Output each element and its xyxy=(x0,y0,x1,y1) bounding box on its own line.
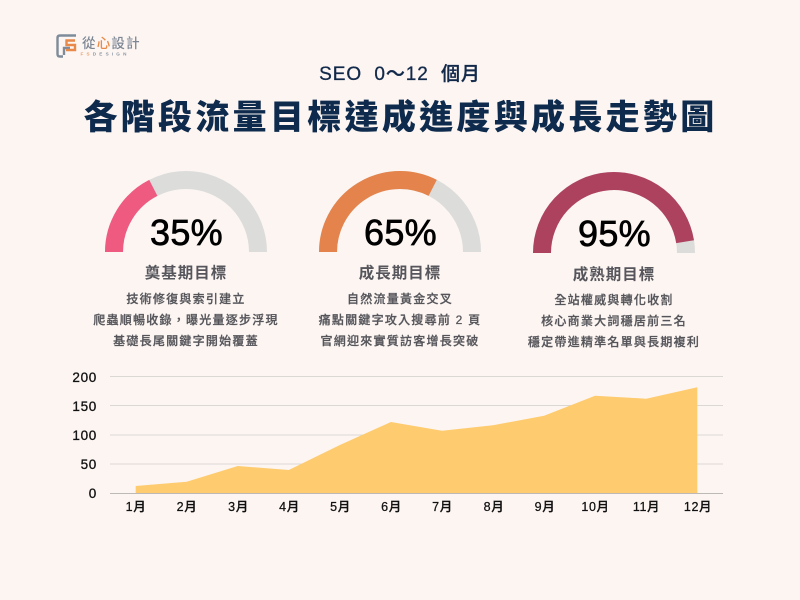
x axis labels: 7月 xyxy=(432,500,453,514)
description: foundation xyxy=(93,291,279,348)
value: 35%: 35% xyxy=(150,212,223,253)
x axis line xyxy=(110,492,723,494)
description: foundation: 基礎長尾關鍵字開始覆蓋 xyxy=(113,333,259,348)
heading: foundation goal: 奠基期目標 xyxy=(145,263,227,282)
x axis labels: 1月 xyxy=(126,500,146,514)
x axis labels: 6月 xyxy=(381,500,402,514)
x axis labels: 2月 xyxy=(177,500,197,514)
description: foundation: 技術修復與索引建立 xyxy=(126,291,246,306)
y axis labels: 50 xyxy=(81,457,97,472)
y axis labels: 150 xyxy=(72,399,97,414)
description: growth: 自然流量黃金交叉 xyxy=(347,291,453,306)
logo subtitle: FSDESIGN xyxy=(80,52,130,56)
gauge: 35% xyxy=(114,180,258,252)
heading: mature goal: 成熟期目標 xyxy=(573,264,655,284)
gauge: 95% xyxy=(542,181,686,253)
description: mature: 穩定帶進精準名單與長期複利 xyxy=(528,334,700,349)
description: mature: 全站權威與轉化收割 xyxy=(554,292,674,307)
description: growth xyxy=(319,291,481,348)
description: mature: 核心商業大詞穩居前三名 xyxy=(541,313,687,328)
value: 95%: 95% xyxy=(578,213,651,254)
panel: mature stage xyxy=(528,181,700,349)
description: mature xyxy=(528,292,700,349)
x axis labels: 5月 xyxy=(330,500,351,514)
description: foundation: 爬蟲順暢收錄，曝光量逐步浮現 xyxy=(93,312,279,327)
area chart: monthly traffic xyxy=(72,370,723,514)
panel: growth stage xyxy=(319,180,481,348)
x axis labels: 10月 xyxy=(581,500,610,514)
grid lines xyxy=(110,376,723,464)
y axis labels: 100 xyxy=(72,428,97,443)
x axis labels: 4月 xyxy=(279,500,300,514)
heading: growth goal: 成長期目標 xyxy=(359,263,441,282)
value: 65%: 65% xyxy=(364,212,437,253)
title: 各階段流量目標達成進度與成長走勢圖 xyxy=(83,98,718,137)
icon: FS mark xyxy=(58,36,76,56)
logo wordmark: 從心設計 xyxy=(82,36,141,51)
x axis labels: 11月 xyxy=(633,500,660,514)
area series xyxy=(136,387,697,493)
x axis labels: 12月 xyxy=(684,500,712,514)
x axis labels xyxy=(126,500,712,514)
gauge: 65% xyxy=(328,180,472,252)
y axis labels: 0 xyxy=(89,486,97,501)
description: growth: 痛點關鍵字攻入搜尋前 2 頁 xyxy=(319,312,481,327)
y axis labels xyxy=(72,370,97,501)
x axis labels: 8月 xyxy=(484,500,504,514)
description: growth: 官網迎來實質訪客增長突破 xyxy=(320,333,480,348)
x axis labels: 9月 xyxy=(535,500,555,514)
x axis labels: 3月 xyxy=(228,500,249,514)
subtitle: SEO 0～12 個月 xyxy=(319,63,481,85)
panel: foundation stage xyxy=(93,180,279,348)
y axis labels: 200 xyxy=(72,370,97,385)
logo: FS Design xyxy=(58,36,141,56)
